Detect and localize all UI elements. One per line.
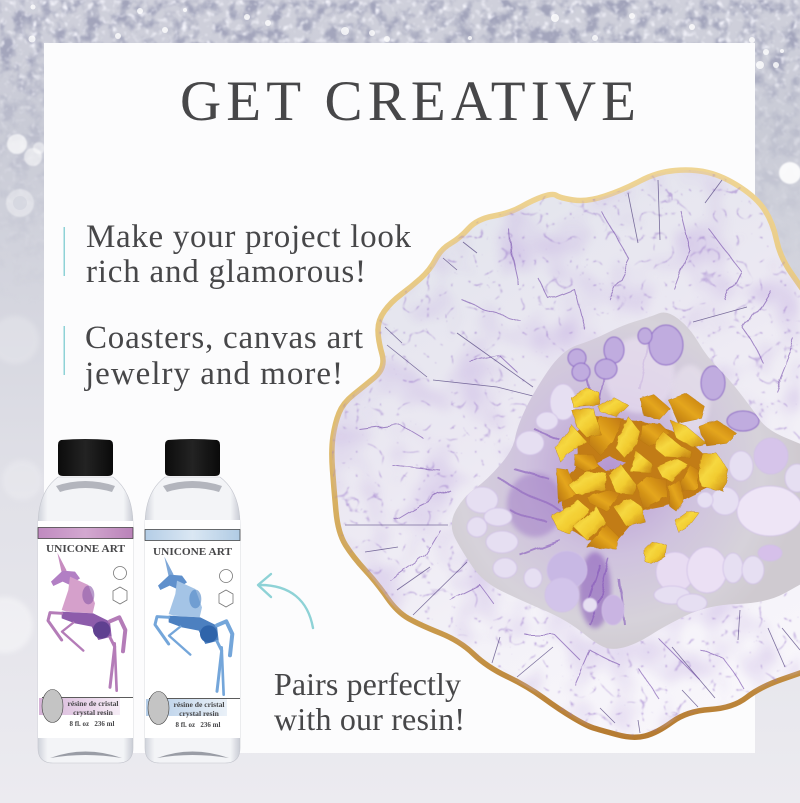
product lines — [173, 700, 225, 729]
medallion — [148, 692, 169, 724]
lavender texture on rim — [330, 165, 800, 745]
flake shadow mass — [562, 417, 717, 543]
accent bar — [64, 326, 65, 375]
bottle body — [145, 477, 240, 763]
lower rule — [149, 697, 240, 700]
bottle: blue label — [145, 439, 240, 763]
shoulder highlight — [56, 481, 115, 492]
bottle: purple label — [38, 439, 133, 763]
purple veins — [360, 210, 795, 700]
lower band — [39, 698, 120, 715]
text block: rich and glamorous — [64, 219, 412, 290]
brand name: UNICONE ART — [46, 543, 126, 555]
radial streaks — [500, 340, 650, 625]
arrow — [258, 574, 313, 628]
medallion — [42, 690, 63, 722]
callout: pairs with resin — [274, 666, 465, 737]
text block: rich and glamorous: rich and glamorous! — [86, 254, 366, 290]
bottle cap — [165, 439, 220, 476]
unicorn — [155, 557, 232, 695]
product lines: résine de cristal — [173, 700, 225, 709]
label stripe — [145, 530, 240, 540]
shoulder highlight — [163, 481, 222, 492]
geode resin coaster — [330, 165, 800, 745]
inner pool — [452, 313, 800, 649]
text block: coasters — [64, 320, 363, 392]
gold flakes — [552, 388, 737, 564]
purple blobs — [466, 325, 800, 628]
text block: rich and glamorous: Make your project look — [86, 219, 412, 255]
brand name: UNICONE ART — [153, 546, 233, 558]
certification badges — [113, 566, 127, 604]
bottle body — [38, 477, 133, 763]
title: GET CREATIVE — [180, 70, 636, 133]
lower rule — [42, 696, 133, 699]
callout: pairs with resin: with our resin! — [274, 701, 465, 737]
callout: pairs with resin: Pairs perfectly — [274, 666, 461, 702]
lower band — [146, 699, 227, 716]
certification badges — [219, 570, 233, 607]
label stripe — [38, 528, 133, 538]
base highlight — [157, 752, 229, 758]
bottle label — [38, 521, 133, 738]
text block: coasters: jewelry and more! — [84, 356, 343, 392]
dark lilac blobs — [568, 325, 759, 431]
product lines: résine de cristal — [67, 699, 119, 708]
product lines: 8 fl. oz 236 ml — [70, 720, 115, 728]
coaster body with gold rim — [332, 170, 800, 737]
unicorn — [48, 553, 125, 691]
product lines: crystal resin — [73, 708, 114, 717]
product lines: 8 fl. oz 236 ml — [176, 721, 221, 729]
bottle cap — [58, 439, 113, 476]
white panel — [44, 43, 755, 753]
product lines — [67, 699, 119, 728]
text block: coasters: Coasters, canvas art — [85, 320, 363, 356]
bottle label — [145, 520, 240, 738]
base highlight — [50, 752, 122, 758]
pale blobs — [466, 384, 800, 625]
dark cracks — [345, 180, 800, 733]
accent bar — [64, 227, 65, 276]
product lines: crystal resin — [179, 709, 220, 718]
